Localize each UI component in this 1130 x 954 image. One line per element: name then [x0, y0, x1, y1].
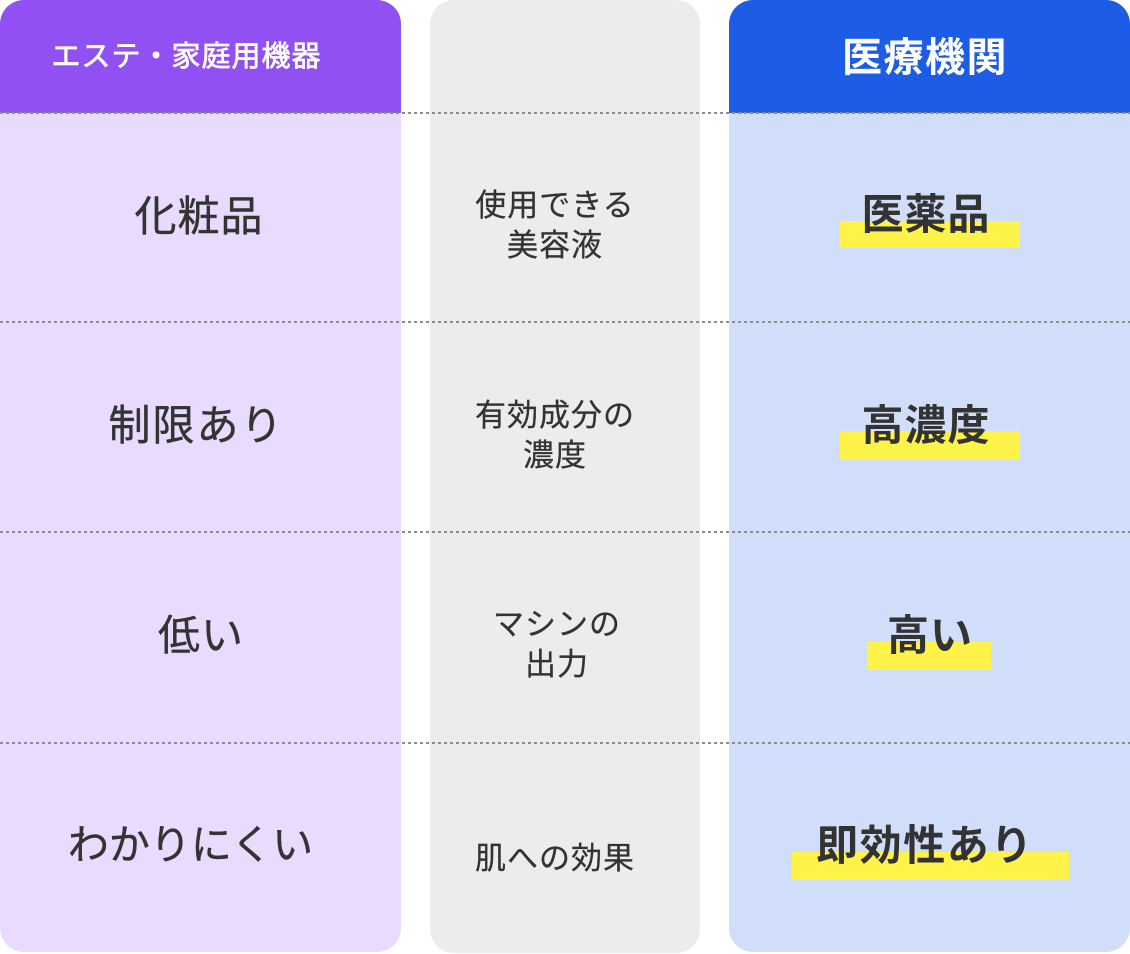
- right row 4: immediate effect: 即効性あり: [816, 822, 1034, 869]
- heading: medical institutions: [729, 0, 1130, 113]
- heading text: home and salon devices: エステ・家庭用機器: [51, 41, 322, 73]
- middle row 3: machine output: [493, 607, 621, 682]
- highlight: immediate effect: [792, 852, 1069, 880]
- middle row 3: machine output: マシンの: [493, 607, 621, 642]
- left row 3: low: 低い: [158, 612, 244, 659]
- panel: home and salon devices: [0, 0, 401, 952]
- middle row 2: active ingredient concentration: 有効成分の: [475, 398, 635, 433]
- right row 2: high concentration: 高濃度: [861, 402, 991, 449]
- middle row 2: active ingredient concentration: 濃度: [523, 438, 587, 473]
- middle row 1: usable serums: [475, 188, 635, 263]
- highlight: high concentration: [840, 431, 1020, 459]
- middle row 1: usable serums: 美容液: [507, 228, 603, 263]
- highlight: medicine: [840, 221, 1020, 248]
- right row 3: high: 高い: [887, 612, 973, 659]
- middle row 1: usable serums: 使用できる: [475, 188, 635, 223]
- heading text: medical institutions: 医療機関: [842, 36, 1008, 80]
- panel: medical institutions: [729, 0, 1130, 952]
- heading: home and salon devices: [0, 0, 401, 113]
- left row 1: cosmetics: 化粧品: [134, 193, 264, 240]
- middle row 3: machine output: 出力: [525, 647, 589, 682]
- middle row 2: active ingredient concentration: [475, 398, 635, 473]
- right row 1: medicine: 医薬品: [861, 191, 991, 238]
- highlight: high: [867, 642, 991, 670]
- left row 4: hard to notice: わかりにくい: [68, 822, 313, 868]
- panel: comparison items: [430, 0, 700, 953]
- middle row 4: effect on skin: 肌への効果: [475, 841, 635, 876]
- left row 2: limited: 制限あり: [108, 402, 285, 449]
